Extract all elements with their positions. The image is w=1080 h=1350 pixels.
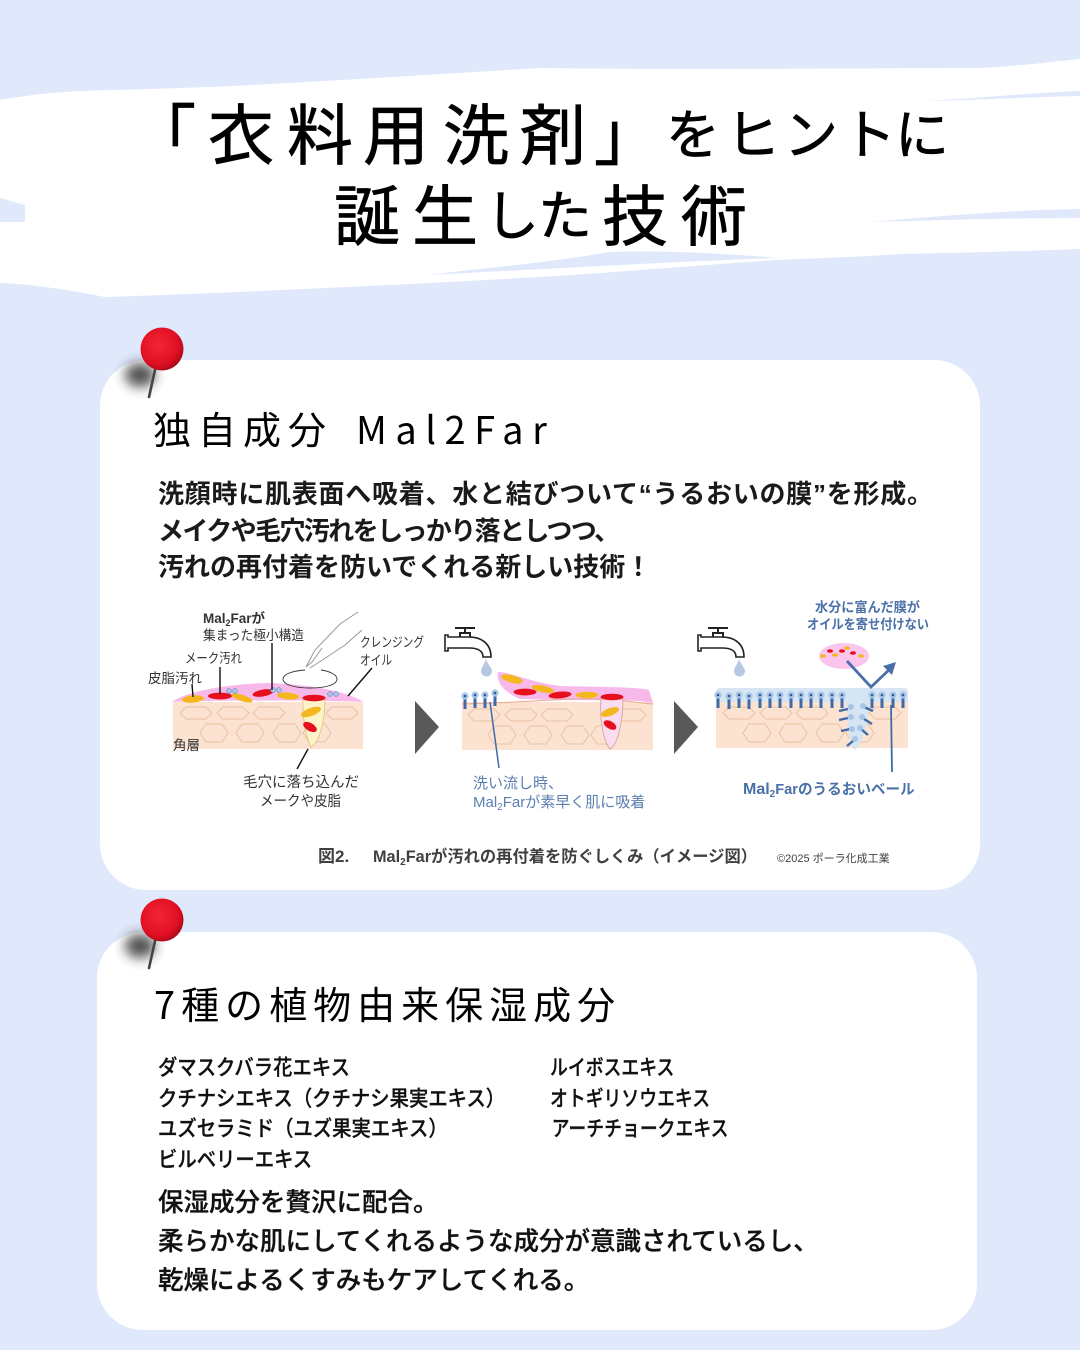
figure caption (318, 847, 890, 868)
title: ヒ (726, 91, 780, 170)
ingredient list right (550, 1056, 729, 1141)
title: に (895, 91, 949, 170)
title: 術 (681, 164, 747, 260)
step 1 illustration: メーク汚れ (185, 651, 242, 666)
step 3 illustration: オイルを寄せ付けない (807, 616, 929, 632)
step 1 illustration: 毛穴に落ち込んだ (243, 774, 359, 791)
title: を (666, 91, 720, 170)
description text: 洗顔時に肌表面へ吸着、水と結びついて“うるおいの膜”を形成。 (158, 479, 934, 509)
description text: 柔らかな肌にしてくれるような成分が意識されているし、 (158, 1228, 819, 1256)
step 2 illustration (445, 628, 653, 813)
description text: 乾燥によるくすみもケアしてくれる。 (158, 1267, 589, 1295)
icon: red push pin 2 (116, 898, 184, 970)
white brush banner (0, 59, 1080, 297)
arrow: step 1 to 2 (415, 701, 439, 754)
ingredient list left (158, 1056, 505, 1172)
heading: Mal2Far: 独自成分 Mal2Far (153, 400, 555, 455)
description text: メイクや毛穴汚れをしっかり落としつつ、 (158, 516, 618, 546)
step 1 illustration (148, 610, 424, 810)
title: ン (784, 91, 838, 170)
step 1 illustration: クレンジング (360, 635, 424, 650)
description text (158, 1189, 819, 1295)
panel: Mal2Far (100, 360, 980, 890)
title: し (485, 172, 539, 251)
description text (158, 479, 934, 582)
ingredient list right: ルイボスエキス (550, 1056, 674, 1080)
description text: 保湿成分を贅沢に配合。 (158, 1189, 439, 1217)
icon: red push pin 1 (116, 328, 184, 398)
title: 剤 (520, 83, 586, 179)
step 1 illustration: Mal (203, 611, 226, 626)
ingredient list left: ユズセラミド（ユズ果実エキス） (158, 1117, 448, 1141)
step 3 illustration: Farのうるおいベール (775, 781, 915, 798)
step 1 illustration: 集まった極小構造 (203, 628, 304, 643)
diagram: Mal2Far mechanism (148, 599, 929, 868)
title: 「 (130, 83, 196, 179)
figure caption: ©2025 ポーラ化成工業 (777, 852, 890, 865)
ingredient list left: クチナシエキス（クチナシ果実エキス） (158, 1086, 505, 1110)
step 3 illustration: 2 (770, 789, 776, 800)
step 2 illustration: Mal (473, 794, 497, 811)
step 1 illustration: 2 (226, 618, 231, 628)
title: 技 (602, 164, 668, 260)
figure caption: Mal (373, 848, 400, 866)
step 1 illustration: 角層 (173, 738, 200, 753)
title: 用 (363, 83, 429, 179)
title: 生 (412, 164, 478, 260)
step 2 illustration: Farが素早く肌に吸着 (503, 794, 645, 811)
step 2 illustration: 2 (497, 802, 503, 813)
arrow: step 2 to 3 (674, 701, 698, 754)
step 3 illustration: 水分に富んだ膜が (815, 599, 920, 615)
title: 洗 (443, 83, 509, 179)
ingredient list left: ビルベリーエキス (158, 1148, 312, 1172)
figure caption: 2 (400, 857, 406, 868)
step 1 illustration: 皮脂汚れ (148, 671, 202, 686)
ingredient list right: アーチチョークエキス (552, 1117, 729, 1141)
step 3 illustration (698, 599, 929, 800)
title: 料 (287, 83, 353, 179)
title: 誕 (334, 164, 400, 260)
title: た (538, 172, 592, 251)
title (130, 83, 949, 260)
step 1 illustration: メークや皮脂 (260, 793, 341, 810)
heading: seven botanical ingredients: 7種の植物由来保湿成分 (154, 975, 621, 1030)
figure caption: Farが汚れの再付着を防ぐしくみ（イメージ図） (406, 847, 757, 866)
step 1 illustration: Farが (231, 610, 266, 626)
title: ト (842, 91, 896, 170)
ingredient list right: オトギリソウエキス (550, 1086, 710, 1110)
panel: botanical moisturising ingredients (97, 932, 977, 1330)
title: 衣 (208, 83, 274, 179)
title: 」 (594, 83, 660, 179)
step 1 illustration: オイル (360, 653, 392, 668)
step 3 illustration: Mal (743, 781, 770, 798)
ingredient list left: ダマスクバラ花エキス (158, 1056, 350, 1080)
description text: 汚れの再付着を防いでくれる新しい技術！ (158, 552, 651, 582)
figure caption: 図2. (318, 847, 349, 866)
step 2 illustration: 洗い流し時、 (473, 775, 563, 792)
